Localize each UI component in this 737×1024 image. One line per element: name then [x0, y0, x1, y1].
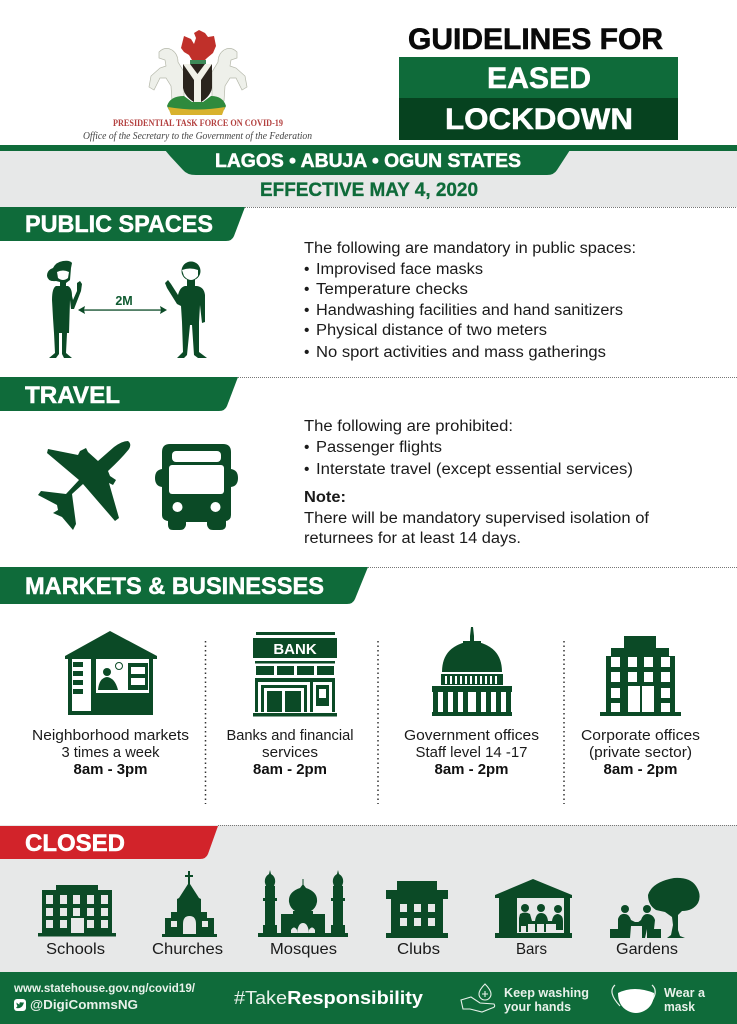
icon: club building	[386, 881, 448, 938]
text block: prohibited list and note: There will be mandatory supervised isolation of	[304, 510, 650, 527]
text block: mandatory list: Physical distance of two meters	[316, 322, 547, 339]
icon: mosque	[258, 870, 348, 937]
text block: prohibited list and note: •	[304, 461, 309, 478]
text block: prohibited list and note: Passenger flights	[316, 439, 442, 456]
icon: shield	[183, 64, 212, 104]
icon: airplane	[38, 441, 130, 530]
text block: prohibited list and note: returnees for at least 14 days.	[304, 530, 521, 547]
icon: face mask	[612, 985, 655, 1013]
icon: eagle	[181, 30, 216, 60]
task force name: PRESIDENTIAL TASK FORCE ON COVID-19	[113, 118, 283, 128]
text block: prohibited list and note: •	[304, 439, 309, 456]
banner: closed: CLOSED	[25, 830, 125, 857]
text: keep washing your hands: Keep washing	[504, 986, 589, 1000]
panel: closed	[0, 825, 737, 972]
text: banks: 8am - 2pm	[253, 762, 327, 778]
text block: mandatory list: •	[304, 302, 309, 319]
icon: distance arrow with 2M label	[78, 294, 167, 314]
effective date: EFFECTIVE MAY 4, 2020	[260, 180, 478, 201]
text: wear a mask	[664, 986, 706, 1014]
title	[399, 23, 678, 140]
heading box: lockdown	[399, 98, 678, 140]
heading box: eased	[399, 57, 678, 98]
text block: prohibited list and note	[304, 418, 650, 547]
icon: bus	[155, 444, 238, 530]
icon: green base	[167, 96, 226, 110]
icon: bank	[253, 632, 337, 716]
icon: right horse	[212, 48, 247, 101]
text: banks	[226, 728, 354, 778]
text: corporate offices	[581, 728, 700, 778]
location band	[0, 145, 737, 207]
label: mosques: Mosques	[270, 941, 337, 958]
text: neighborhood markets: 3 times a week	[62, 745, 160, 761]
banner: public spaces: PUBLIC SPACES	[25, 211, 213, 238]
text block: mandatory list: •	[304, 281, 309, 298]
panel: travel	[0, 377, 737, 547]
text block: mandatory list: •	[304, 322, 309, 339]
text block: mandatory list: Temperature checks	[316, 281, 468, 298]
icon: bar	[495, 879, 572, 938]
label: clubs: Clubs	[397, 941, 440, 958]
text: wear a mask: mask	[664, 1000, 695, 1014]
text block: mandatory list: No sport activities and mass gatherings	[316, 344, 606, 361]
text: banks: services	[262, 745, 318, 761]
icon: twitter	[14, 999, 26, 1011]
text: corporate offices: 8am - 2pm	[604, 762, 678, 778]
text: keep washing your hands	[504, 986, 589, 1014]
text block: mandatory list: The following are mandatory in public spaces:	[304, 240, 636, 257]
label: schools: Schools	[46, 941, 105, 958]
text block: mandatory list	[304, 240, 636, 361]
text block: mandatory list: •	[304, 261, 309, 278]
text: government offices	[404, 728, 539, 778]
text: corporate offices: Corporate offices	[581, 728, 700, 744]
banner: public spaces	[0, 207, 245, 241]
text: government offices: Government offices	[404, 728, 539, 744]
label: bars: Bars	[516, 941, 547, 958]
icon: distance arrow with 2M label: 2M	[115, 294, 133, 308]
column dividers	[206, 641, 564, 804]
text block: mandatory list: •	[304, 344, 309, 361]
icon: left horse	[149, 48, 184, 101]
text block: prohibited list and note: Note:	[304, 489, 346, 506]
icon: motto ribbon	[168, 107, 225, 115]
ribbon: states	[165, 150, 570, 175]
text block: prohibited list and note: Interstate travel (except essential services)	[316, 461, 633, 478]
label: churches: Churches	[152, 941, 223, 958]
text: government offices: 8am - 2pm	[434, 762, 508, 778]
label: gardens: Gardens	[616, 941, 678, 958]
office name: Office of the Secretary to the Government of the Federation	[83, 131, 312, 142]
banner: markets and businesses	[0, 567, 368, 604]
header logo: coat of arms and task force text	[83, 30, 312, 142]
icon: corporate office	[600, 636, 681, 716]
text: keep washing your hands: your hands	[504, 1000, 571, 1014]
footer	[0, 972, 737, 1024]
icon: bank: BANK	[273, 641, 317, 658]
title: EASED	[487, 62, 591, 95]
text: government offices: Staff level 14 -17	[416, 745, 528, 761]
banner: markets and businesses: MARKETS & BUSINESSES	[25, 573, 324, 600]
hashtag: #Take Responsibility	[234, 988, 423, 1008]
icon: crest torse	[190, 60, 206, 64]
banner: travel: TRAVEL	[25, 382, 120, 409]
panel: markets and businesses	[0, 567, 737, 804]
location band: LAGOS • ABUJA • OGUN STATES	[215, 151, 521, 172]
text: neighborhood markets	[32, 728, 189, 778]
text: neighborhood markets: 8am - 3pm	[74, 762, 148, 778]
banner: closed	[0, 826, 218, 859]
text: neighborhood markets: Neighborhood markets	[32, 728, 189, 744]
text: wear a mask: Wear a	[664, 986, 706, 1000]
website: www.statehouse.gov.ng/covid19/	[13, 983, 196, 995]
icon: school	[38, 885, 116, 936]
icon: man with mask	[165, 262, 207, 358]
icon: government building	[432, 627, 512, 716]
text block: prohibited list and note: The following are prohibited:	[304, 418, 513, 435]
icon: church	[162, 871, 217, 937]
handle: @DigiCommsNG	[30, 998, 138, 1012]
heading line: guidelines for: GUIDELINES FOR	[408, 23, 663, 56]
title: LOCKDOWN	[445, 103, 633, 136]
text block: mandatory list: Handwashing facilities and hand sanitizers	[316, 302, 623, 319]
text block: mandatory list: Improvised face masks	[316, 261, 483, 278]
text: corporate offices: (private sector)	[589, 745, 692, 761]
panel: public spaces	[0, 207, 737, 361]
icon: garden with tree and people	[610, 878, 700, 938]
icon: market stall	[65, 631, 157, 715]
icon: washing hands	[461, 984, 495, 1012]
text: banks: Banks and financial	[226, 728, 354, 744]
banner: travel	[0, 377, 238, 411]
icon: woman with mask	[47, 261, 82, 358]
